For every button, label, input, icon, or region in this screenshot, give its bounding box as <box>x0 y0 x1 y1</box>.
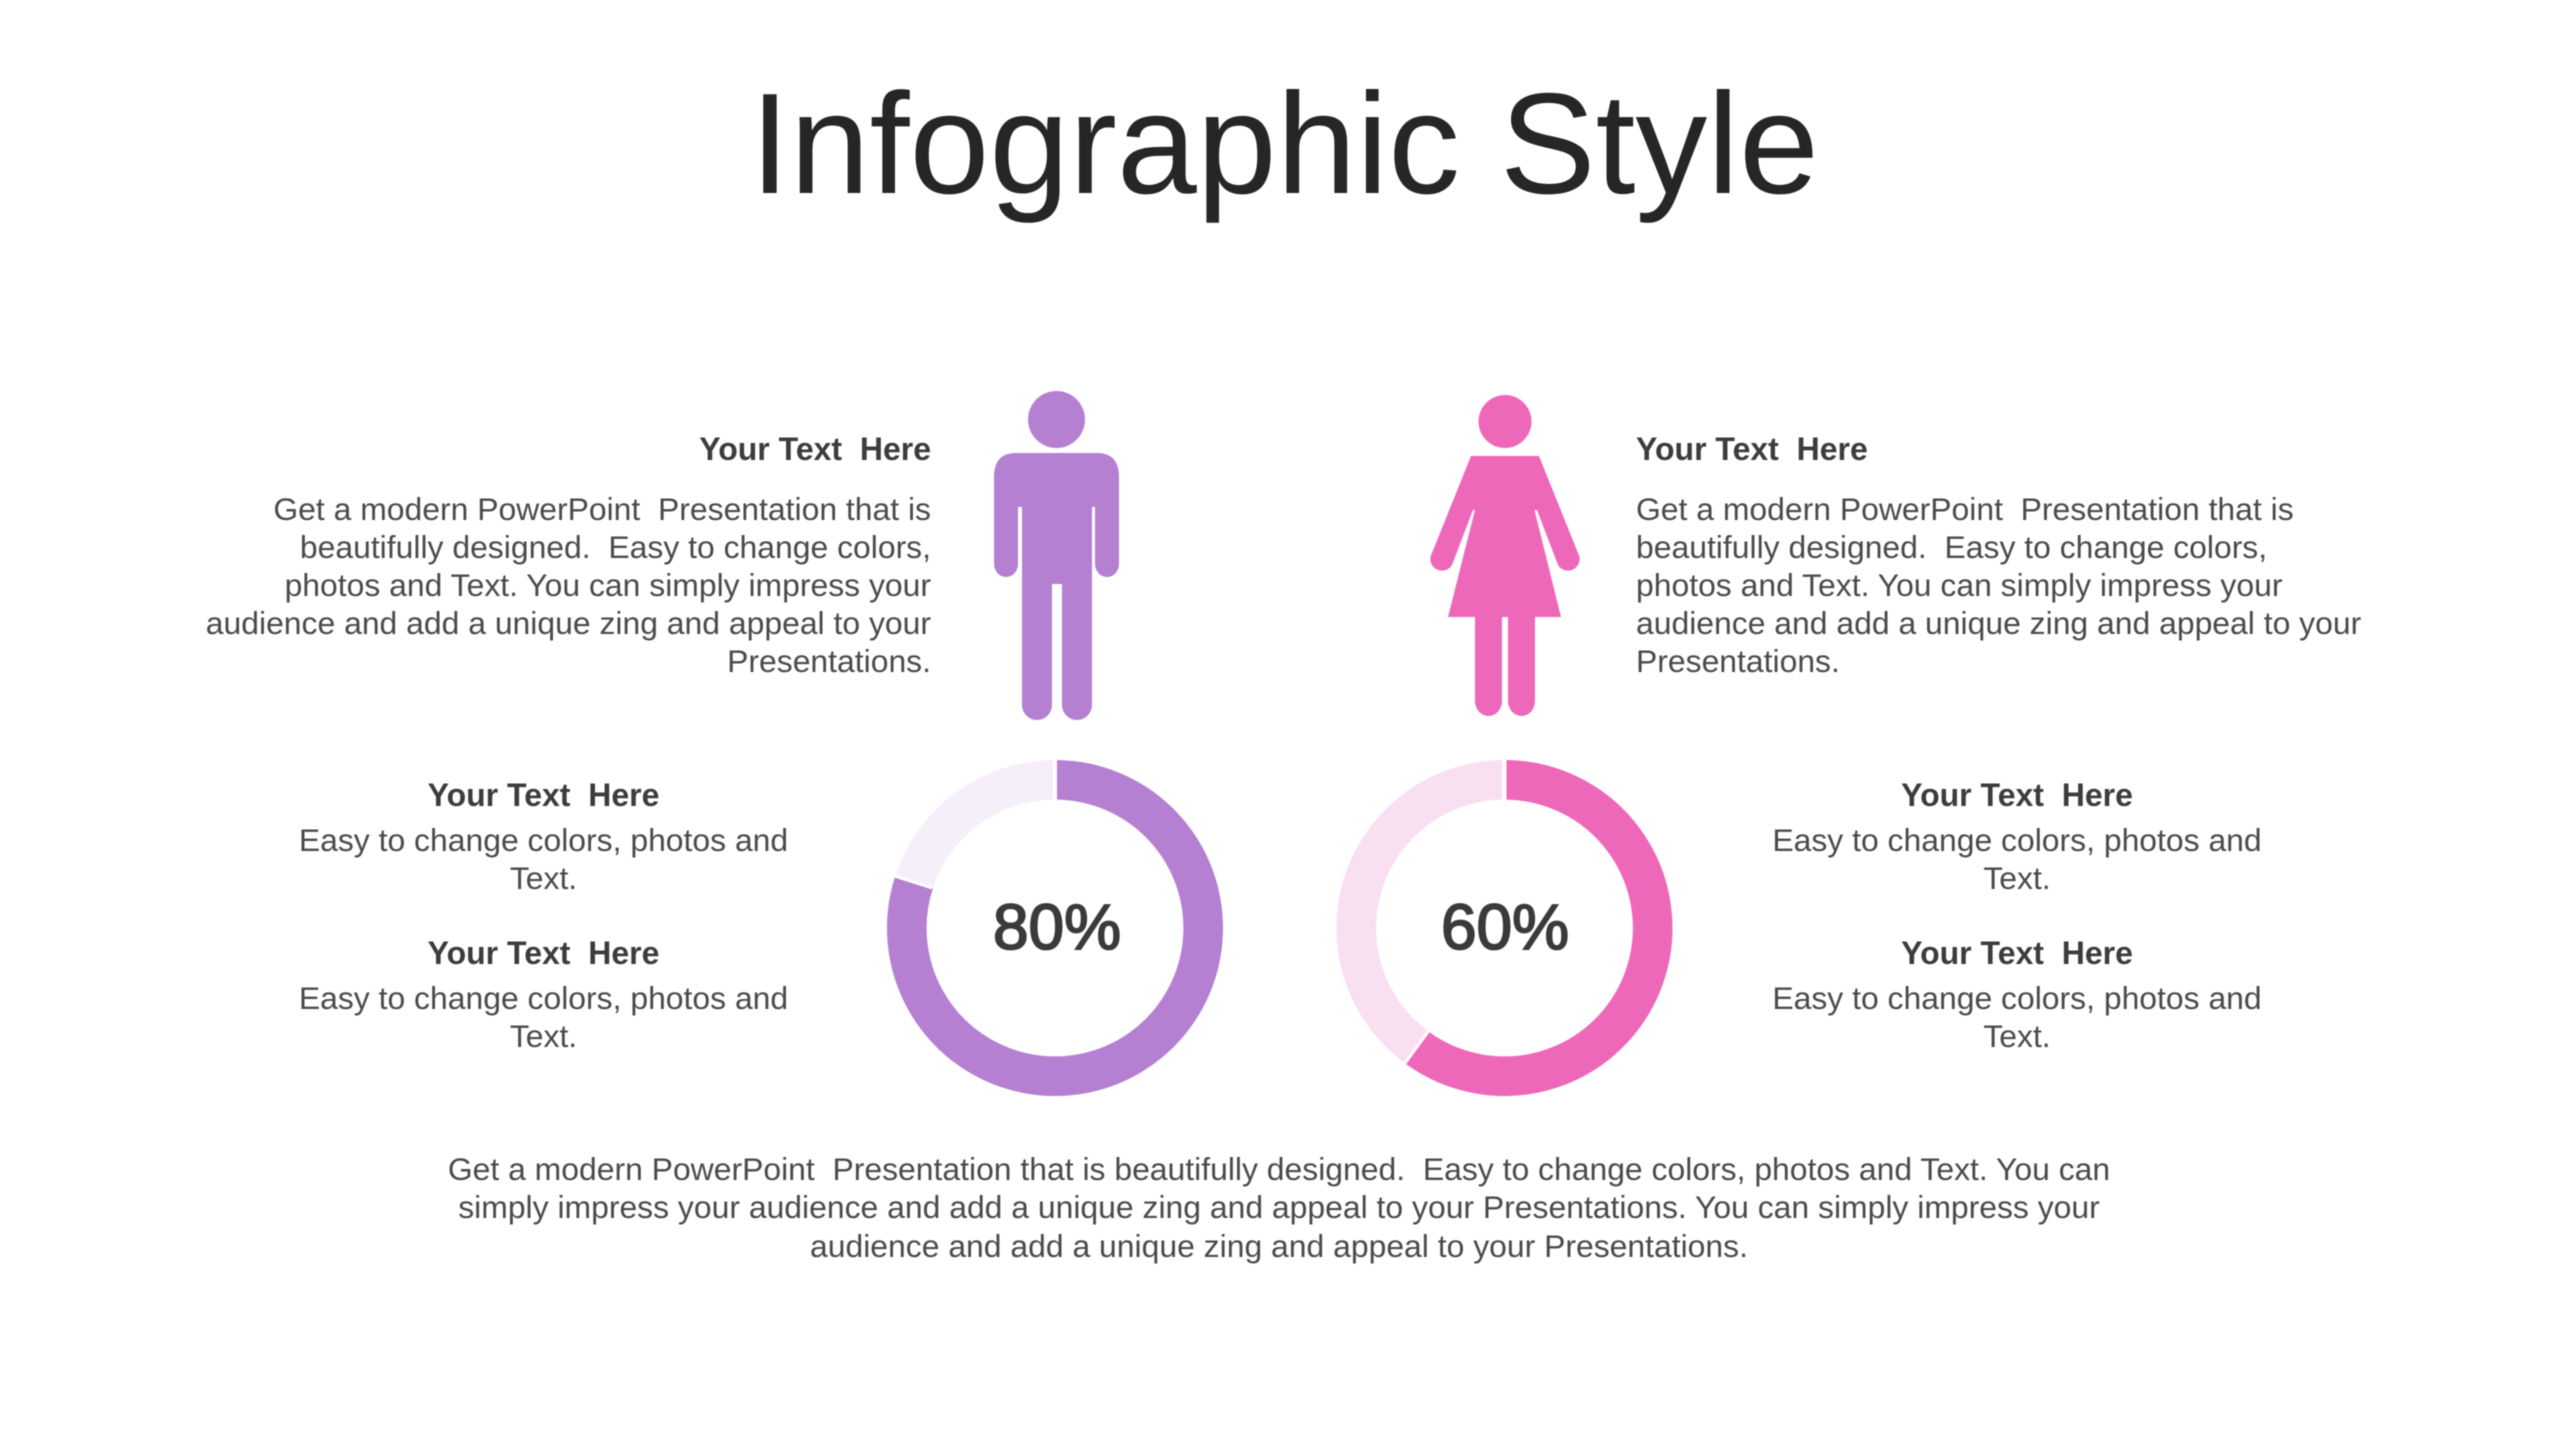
text block: right upper <box>1772 777 2262 896</box>
paragraph: top left: audience and add a unique zing and appeal to your <box>206 605 931 641</box>
heading: Your Text Here <box>1901 935 2133 971</box>
description: Text. <box>1983 860 2051 896</box>
paragraph: top right: Presentations. <box>1636 643 1840 679</box>
value: 60%: 60% <box>1441 891 1569 963</box>
paragraph: top left: photos and Text. You can simply impress your <box>285 567 931 603</box>
text block: bottom paragraph: simply impress your audience and add a unique zing and appeal to your Presentations. You can simply impress your <box>458 1189 2100 1225</box>
text block: top right <box>1636 431 2362 679</box>
donut chart: 80% <box>882 756 1203 1076</box>
paragraph: top right: audience and add a unique zing and appeal to your <box>1636 605 2362 641</box>
heading: Your Text Here <box>1901 777 2133 813</box>
heading: top right: Your Text Here <box>1636 431 1868 467</box>
description: Text. <box>510 1018 577 1054</box>
icon: woman <box>1430 395 1580 716</box>
title: Infographic Style <box>750 64 1819 224</box>
text block: bottom paragraph: audience and add a unique zing and appeal to your Presentations. <box>810 1228 1748 1264</box>
description: Easy to change colors, photos and <box>299 822 788 858</box>
paragraph: top left: Get a modern PowerPoint Presentation that is <box>273 491 931 527</box>
text block: bottom paragraph: Get a modern PowerPoint Presentation that is beautifully designed. Easy to change colors, photos and Text. You can <box>448 1151 2110 1187</box>
paragraph: top right: photos and Text. You can simply impress your <box>1636 567 2283 603</box>
description: Easy to change colors, photos and <box>1772 980 2262 1016</box>
paragraph: top right: Get a modern PowerPoint Presentation that is <box>1636 491 2294 527</box>
description: Text. <box>510 860 577 896</box>
description: Easy to change colors, photos and <box>1772 822 2262 858</box>
paragraph: top right: beautifully designed. Easy to change colors, <box>1636 529 2267 565</box>
text block: right lower <box>1772 935 2262 1054</box>
value: 80%: 80% <box>993 891 1121 963</box>
heading: top left: Your Text Here <box>699 431 931 467</box>
donut chart: 60% <box>1356 756 1653 1076</box>
heading: Your Text Here <box>428 935 659 971</box>
text block: left upper <box>299 777 788 896</box>
heading: Your Text Here <box>428 777 659 813</box>
description: Easy to change colors, photos and <box>299 980 788 1016</box>
paragraph: top left: beautifully designed. Easy to change colors, <box>300 529 931 565</box>
paragraph: top left: Presentations. <box>727 643 931 679</box>
icon: man <box>994 391 1119 720</box>
description: Text. <box>1983 1018 2051 1054</box>
text block: left lower <box>299 935 788 1054</box>
text block: top left <box>206 431 931 679</box>
